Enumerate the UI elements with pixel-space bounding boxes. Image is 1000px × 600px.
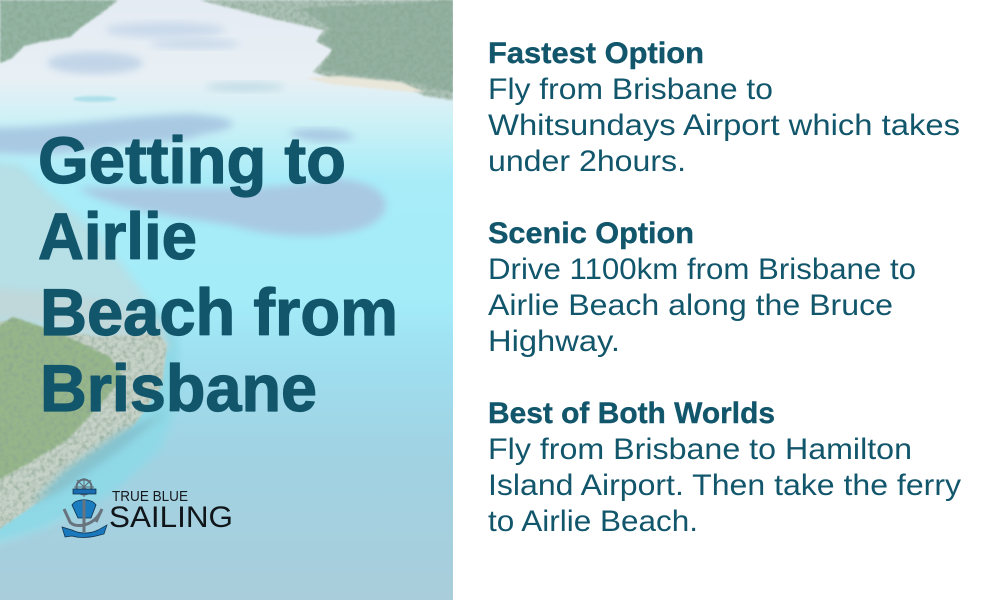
forest top right	[200, 0, 453, 100]
heading: Best of Both Worlds: Best of Both Worlds	[488, 397, 775, 430]
dark water patches	[0, 22, 386, 236]
section: fastest option	[488, 37, 960, 178]
logo: True Blue Sailing	[62, 478, 233, 538]
rocky shore lower island	[0, 320, 167, 532]
body: fastest option text: Whitsundays Airport which takes	[488, 109, 960, 142]
logo wordmark: TRUE BLUE	[112, 488, 188, 505]
body: fastest option text	[488, 73, 960, 178]
body: scenic option text: Highway.	[488, 325, 620, 358]
forest top left	[0, 0, 118, 63]
left panel title: Airlie	[38, 199, 197, 273]
reef stain below rocks	[33, 418, 156, 504]
section: best of both worlds	[488, 397, 961, 538]
icon: anchor and helm emblem	[62, 478, 107, 538]
body: best of both worlds text: to Airlie Beach.	[488, 505, 698, 538]
body: best of both worlds text: Island Airport. Then take the ferry	[488, 469, 961, 502]
section: scenic option	[488, 217, 916, 358]
heading: Fastest Option: Fastest Option	[488, 37, 704, 70]
cyan halo around lower island	[0, 300, 180, 548]
background photo panel: aerial view of bay	[0, 0, 453, 600]
body: fastest option text: under 2hours.	[488, 145, 686, 178]
body: best of both worlds text: Fly from Brisbane to Hamilton	[488, 433, 912, 466]
body: fastest option text: Fly from Brisbane to	[488, 73, 773, 106]
logo wordmark	[109, 488, 233, 534]
left panel title: Brisbane	[40, 351, 317, 425]
left panel title	[38, 123, 398, 425]
left panel title: Getting to	[38, 123, 346, 197]
body: scenic option text: Drive 1100km from Brisbane to	[488, 253, 916, 286]
heading: Scenic Option: Scenic Option	[488, 217, 694, 250]
sandy shoal above lower island	[0, 288, 170, 350]
forest lower island	[0, 317, 123, 482]
left panel title: Beach from	[40, 275, 398, 349]
shallow sand bar left	[0, 162, 147, 334]
logo wordmark: SAILING	[109, 501, 233, 534]
body: best of both worlds text	[488, 433, 961, 538]
beach top right	[305, 76, 425, 92]
body: scenic option text: Airlie Beach along the Bruce	[488, 289, 893, 322]
body: scenic option text	[488, 253, 916, 358]
